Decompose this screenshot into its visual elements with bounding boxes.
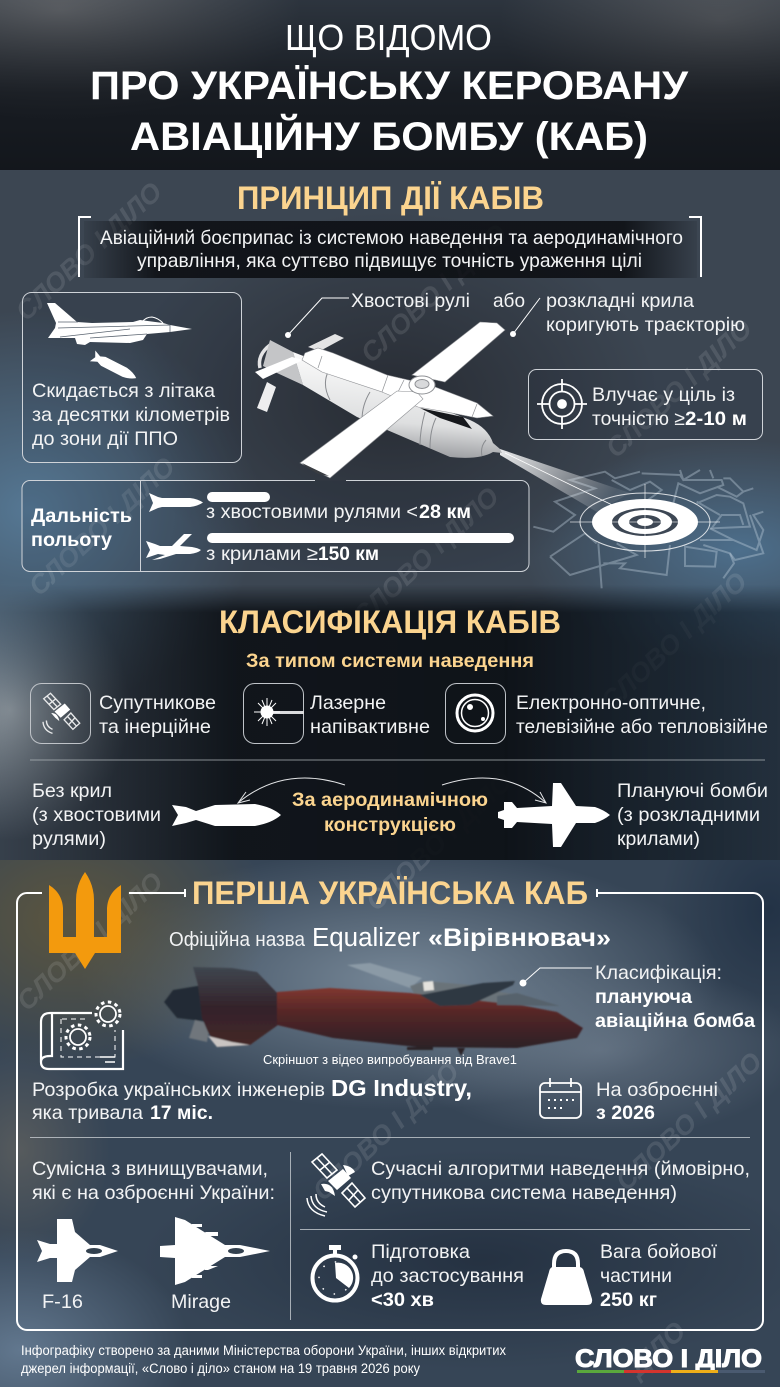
classification callout bbox=[520, 962, 755, 1032]
heading: range bbox=[31, 505, 132, 551]
aerodynamic: no wings: Без крил bbox=[32, 780, 112, 802]
section backdrop: classification bbox=[0, 585, 780, 860]
text: drop description bbox=[32, 380, 230, 450]
title: АВІАЦІЙНУ БОМБУ (КАБ) bbox=[130, 113, 648, 159]
range bar: tail rudders: з хвостовими рулями < bbox=[206, 501, 418, 523]
heading: range: Дальність bbox=[31, 505, 132, 527]
in service text bbox=[596, 1079, 718, 1124]
city map with target bbox=[500, 449, 763, 588]
icon: satellite large bbox=[307, 1154, 365, 1216]
text: drop description: Скидається з літака bbox=[32, 380, 215, 402]
text: drop description: за десятки кілометрів bbox=[32, 404, 230, 426]
panel: accuracy bbox=[528, 370, 762, 440]
title: ПРО УКРАЇНСЬКУ КЕРОВАНУ bbox=[90, 64, 689, 108]
logo: СЛОВО І ДІЛО bbox=[575, 1345, 762, 1373]
preparation text bbox=[371, 1241, 524, 1311]
watermarks: СЛОВО І ДІЛО bbox=[595, 566, 753, 716]
range bar: wings bbox=[146, 533, 514, 565]
watermarks: СЛОВО І ДІЛО bbox=[10, 176, 168, 326]
guidance algorithms text: Сучасні алгоритми наведення (ймовірно, bbox=[371, 1158, 750, 1180]
compatibility text: які є на озброєнні України: bbox=[32, 1182, 275, 1204]
arrow: left bbox=[238, 778, 345, 803]
guidance: laser: напівактивне bbox=[310, 716, 430, 738]
heading: classification: КЛАСИФІКАЦІЯ КАБІВ bbox=[219, 604, 561, 640]
aerodynamic: glide bombs: Плануючі бомби bbox=[617, 780, 768, 802]
subheading: guidance type: За типом системи наведення bbox=[246, 651, 534, 672]
watermarks: ДІЛО bbox=[621, 1316, 691, 1384]
preparation text: до застосування bbox=[371, 1265, 524, 1287]
preparation text: <30 хв bbox=[371, 1289, 434, 1311]
classification callout: авіаційна бомба bbox=[595, 1010, 755, 1032]
icon: falling bomb bbox=[90, 351, 139, 383]
heading: range: польоту bbox=[31, 529, 112, 551]
text: drop description: до зони дії ППО bbox=[32, 428, 178, 450]
missile photo bbox=[164, 963, 583, 1056]
guidance: laser bbox=[244, 684, 430, 744]
footer source: джерел інформації, «Слово і діло» станом на 19 травня 2026 року bbox=[21, 1361, 420, 1376]
aerodynamic: no wings: рулями) bbox=[32, 828, 106, 850]
icon: calendar bbox=[540, 1078, 581, 1118]
watermarks: СЛОВО І ДІЛО bbox=[355, 218, 513, 368]
callout labels: tail rudders or wings: розкладні крила bbox=[546, 290, 694, 312]
aerodynamic: no wings bbox=[32, 780, 281, 850]
guidance: satellite bbox=[30, 684, 216, 744]
guidance: satellite: та інерційне bbox=[99, 716, 211, 738]
callout labels: tail rudders or wings: або bbox=[493, 290, 525, 312]
icon: bomb without wings bbox=[172, 804, 281, 826]
official name: Офіційна назва bbox=[169, 928, 306, 951]
range bar: wings: з крилами ≥ bbox=[206, 543, 318, 565]
footer source: Інфографіку створено за даними Міністерства оборони України, інших відкритих bbox=[21, 1343, 506, 1358]
heading: first Ukrainian KAB: ПЕРША УКРАЇНСЬКА КАБ bbox=[192, 875, 588, 911]
development text bbox=[32, 1075, 472, 1124]
icon: F-16 bbox=[37, 1219, 118, 1313]
compatibility text: Сумісна з винищувачами, bbox=[32, 1158, 268, 1180]
guidance: electro-optical bbox=[446, 684, 768, 744]
development text: Розробка українських інженерів bbox=[32, 1079, 325, 1101]
classification callout: плануюча bbox=[595, 986, 692, 1008]
watermarks: СЛОВО І ДІЛО bbox=[610, 1046, 768, 1196]
caption: Скріншот з відео випробування від Brave1 bbox=[263, 1053, 517, 1067]
guidance algorithms text: супутникова система наведення) bbox=[371, 1182, 677, 1204]
in service text: На озброєнні bbox=[596, 1079, 718, 1101]
development text: яка тривала bbox=[32, 1102, 143, 1124]
icon: stopwatch bbox=[312, 1245, 358, 1300]
watermarks: СЛОВО І ДІЛО bbox=[11, 866, 169, 1016]
warhead weight text bbox=[600, 1241, 718, 1311]
watermarks: СЛОВО І ДІЛО bbox=[347, 481, 505, 631]
icon: Mirage bbox=[160, 1217, 270, 1313]
center label: aerodynamic design: конструкцією bbox=[324, 815, 456, 836]
background: upper sections bbox=[0, 0, 780, 860]
callout labels: tail rudders or wings bbox=[285, 290, 745, 338]
in service text: з 2026 bbox=[596, 1102, 655, 1124]
center label: aerodynamic design bbox=[292, 790, 488, 836]
guidance: laser: Лазерне bbox=[310, 692, 386, 714]
icon: bomb with wings bbox=[498, 783, 610, 847]
target bbox=[570, 484, 720, 558]
preparation text: Підготовка bbox=[371, 1241, 470, 1263]
panel: flight range bbox=[22, 480, 529, 572]
icon: Mirage: Mirage bbox=[171, 1291, 231, 1313]
watermarks: СЛОВО І ДІЛО bbox=[23, 451, 181, 601]
warhead weight text: частини bbox=[600, 1265, 672, 1287]
definition box bbox=[79, 217, 701, 278]
title: ЩО ВІДОМО bbox=[285, 17, 492, 58]
aerodynamic: glide bombs bbox=[498, 780, 768, 850]
panel: first Ukrainian KAB frame bbox=[17, 889, 763, 1330]
range bar: tail rudders bbox=[149, 492, 471, 523]
watermarks: СЛОВО І ДІЛО bbox=[360, 766, 518, 916]
official name bbox=[169, 924, 611, 952]
guidance: electro-optical: Електронно-оптичне, bbox=[516, 692, 706, 714]
icon: F-16: F-16 bbox=[42, 1291, 83, 1313]
center label: aerodynamic design: За аеродинамічною bbox=[292, 790, 488, 811]
footer source bbox=[21, 1343, 506, 1376]
compatibility text bbox=[32, 1158, 275, 1204]
text: accuracy: 2-10 м bbox=[685, 408, 747, 430]
beam bbox=[500, 449, 637, 517]
aerodynamic: no wings: (з хвостовими bbox=[32, 804, 161, 826]
icon: jet side view bbox=[47, 303, 192, 345]
text: accuracy: точністю ≥ bbox=[592, 408, 685, 430]
title backdrop bbox=[0, 0, 780, 170]
warhead weight text: Вага бойової bbox=[600, 1241, 718, 1263]
guidance algorithms text bbox=[371, 1158, 750, 1204]
icon: crosshair target bbox=[537, 379, 587, 429]
guidance: electro-optical: телевізійне або тепловізійне bbox=[516, 716, 768, 738]
official name: Equalizer bbox=[312, 924, 421, 952]
callout labels: tail rudders or wings: Хвостові рулі bbox=[351, 290, 470, 312]
callout labels: tail rudders or wings: коригують траєкторію bbox=[546, 314, 745, 336]
text: accuracy: Влучає у ціль із bbox=[592, 384, 735, 406]
bomb illustration bbox=[255, 322, 505, 478]
watermarks: СЛОВО І ДІЛО bbox=[307, 1056, 465, 1206]
range bar: tail rudders: 28 км bbox=[419, 501, 471, 523]
guidance: satellite: Супутникове bbox=[99, 692, 216, 714]
development text: 17 міс. bbox=[150, 1102, 213, 1124]
definition box: Авіаційний боєприпас із системою наведення та аеродинамічного bbox=[100, 227, 683, 249]
icon: lens bbox=[457, 695, 493, 731]
icon: trident bbox=[49, 872, 121, 969]
warhead weight text: 250 кг bbox=[600, 1289, 657, 1311]
aerodynamic: glide bombs: (з розкладними bbox=[617, 804, 760, 826]
title bbox=[90, 17, 689, 159]
icon: laser burst bbox=[254, 698, 304, 726]
heading: principle: ПРИНЦИП ДІЇ КАБІВ bbox=[237, 180, 544, 216]
definition box: управління, яка суттєво підвищує точність ураження цілі bbox=[137, 250, 642, 272]
icon: blueprint with gears bbox=[41, 1002, 123, 1069]
text: accuracy bbox=[592, 384, 747, 430]
background: first Ukrainian KAB section bbox=[0, 860, 780, 1387]
icon: satellite bbox=[43, 693, 80, 733]
panel: drop from aircraft bbox=[22, 292, 242, 462]
development text: DG Industry, bbox=[331, 1075, 472, 1101]
range bar: wings: 150 км bbox=[318, 543, 379, 565]
icon: weight bbox=[541, 1251, 592, 1305]
official name: «Вірівнювач» bbox=[428, 924, 611, 952]
watermarks: СЛОВО І ДІЛО bbox=[600, 313, 758, 463]
arrow: right bbox=[442, 778, 546, 803]
classification callout: Класифікація: bbox=[595, 962, 722, 984]
aerodynamic: glide bombs: крилами) bbox=[617, 828, 700, 850]
